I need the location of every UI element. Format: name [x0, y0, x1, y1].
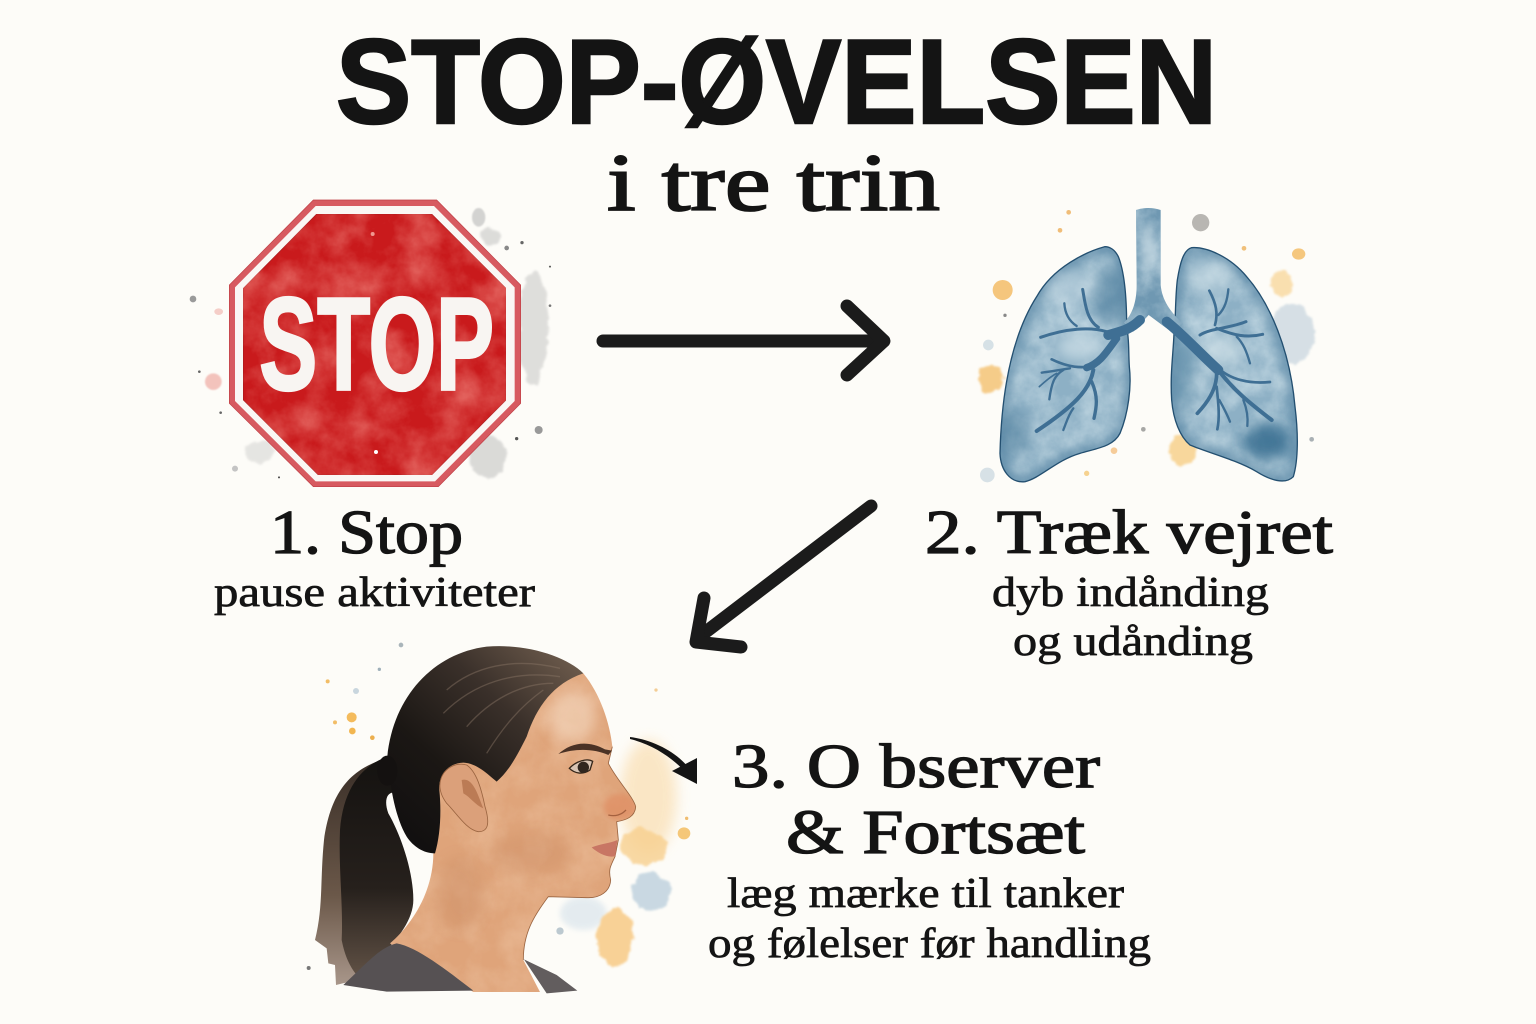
step 2 heading: 2. Træk vejret — [925, 499, 1333, 567]
eyebrow — [558, 744, 612, 755]
eye — [569, 760, 593, 773]
panel: step 3 observe — [307, 643, 1151, 993]
watercolor splashes — [307, 643, 690, 970]
step 1 description: pause aktiviteter — [214, 570, 535, 616]
icon: lungs — [978, 208, 1315, 482]
step 1 heading: 1. Stop — [270, 499, 463, 567]
sign border — [229, 200, 521, 487]
step 3 heading — [732, 733, 1100, 867]
iris — [578, 762, 589, 773]
line 2: & Fortsæt — [786, 799, 1085, 867]
arrow: stop to breathe — [603, 306, 884, 375]
trachea highlight — [1142, 225, 1155, 268]
shirt right — [524, 959, 577, 993]
line 2: og følelser før handling — [708, 921, 1151, 967]
skin shading — [437, 690, 637, 930]
sign lettering: STOP — [259, 270, 494, 417]
subheading: i tre trin — [607, 137, 940, 228]
arrow: curved small — [630, 737, 697, 784]
grey watercolor splashes — [190, 208, 551, 478]
line 2: og udånding — [1013, 619, 1253, 665]
line 1: dyb indånding — [992, 570, 1269, 616]
hair — [387, 646, 583, 853]
infographic canvas — [190, 35, 1334, 994]
small details — [371, 232, 378, 454]
sign red face — [243, 214, 506, 475]
illustration: woman in profile — [307, 643, 690, 993]
neck and face — [390, 673, 636, 992]
shirt left — [343, 943, 473, 992]
left lung shading — [997, 247, 1130, 482]
arrow: breathe to observe — [696, 506, 871, 647]
sign white band — [235, 206, 515, 481]
right lung outline — [1171, 248, 1297, 481]
bronchi — [1037, 289, 1272, 431]
hair tie — [377, 756, 397, 786]
title — [336, 15, 1217, 228]
line 1: læg mærke til tanker — [727, 871, 1124, 917]
translucent ponytail wisps — [315, 762, 377, 985]
left lung outline — [1000, 247, 1130, 482]
color splashes — [978, 210, 1315, 482]
panel: step 1 stop — [190, 200, 551, 616]
step 3 description — [708, 871, 1151, 967]
face outline — [523, 747, 636, 960]
panel: step 2 breathe — [925, 208, 1333, 665]
nostril — [608, 810, 626, 816]
icon: stop sign — [190, 200, 551, 487]
main heading: STOP-ØVELSEN — [336, 15, 1217, 149]
lips — [592, 840, 617, 857]
ear — [440, 764, 488, 832]
trachea — [1124, 208, 1183, 333]
hair strands — [443, 663, 560, 753]
left lung — [1000, 247, 1130, 482]
right lung — [1171, 248, 1297, 481]
step 2 description — [992, 570, 1269, 665]
ponytail — [340, 757, 413, 975]
inner ear — [462, 780, 483, 808]
line 1: 3. O bserver — [732, 733, 1100, 801]
right lung shading — [1171, 248, 1297, 481]
